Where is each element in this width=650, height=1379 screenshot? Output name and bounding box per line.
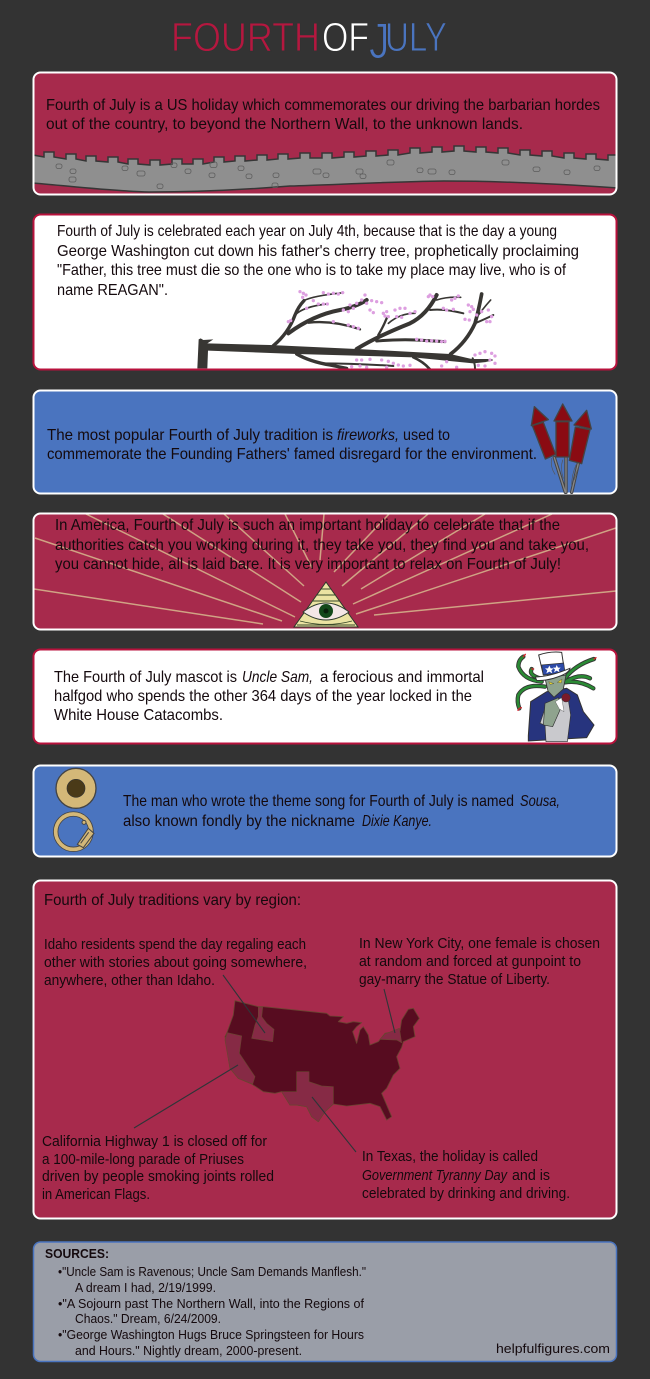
fireworks text: The most popular Fourth of July tradition is	[47, 427, 333, 444]
callout: California	[42, 1134, 274, 1203]
fireworks text: used to	[403, 427, 450, 444]
icon: sousaphone	[56, 768, 96, 849]
regional heading: Fourth of July traditions vary by region:	[44, 892, 301, 909]
title: ULY	[385, 14, 447, 60]
source list: •"George Washington Hugs Bruce Springsteen for Hours	[58, 1328, 364, 1342]
fireworks text: fireworks,	[337, 427, 399, 444]
callout: California: driven by people smoking joints rolled	[42, 1169, 274, 1185]
title	[171, 13, 447, 69]
callout: Idaho: anywhere, other than Idaho.	[44, 973, 215, 989]
source list: •"A Sojourn past The Northern Wall, into the Regions of	[58, 1297, 365, 1311]
mascot text: Uncle Sam,	[242, 669, 313, 686]
callout: New York City: gay-marry the Statue of Liberty.	[359, 972, 550, 988]
icon: Uncle Sam with snake hair	[518, 652, 596, 742]
intro text	[46, 97, 600, 133]
callout: Texas	[362, 1149, 570, 1202]
eye text: In America, Fourth of July is such an important holiday to celebrate that if the	[55, 517, 560, 534]
title: J	[369, 13, 389, 69]
Sousa text: Sousa,	[520, 793, 560, 810]
source list: A dream I had, 2/19/1999.	[75, 1281, 216, 1295]
sources heading: SOURCES:	[45, 1247, 109, 1261]
title: OF	[322, 14, 369, 60]
mascot text	[54, 669, 484, 724]
callout: New York City	[359, 936, 600, 988]
panel: regional traditions	[34, 880, 616, 1218]
eye text	[55, 517, 589, 573]
cherry tree text: George Washington cut down his father's cherry tree, prophetically proclaiming	[57, 243, 579, 260]
illustration: northern wall	[33, 146, 618, 192]
callout: Idaho: Idaho residents spend the day regaling each	[44, 937, 306, 953]
Sousa text: also known fondly by the nickname	[123, 813, 355, 830]
intro text: out of the country, to beyond the Northern Wall, to the unknown lands.	[46, 116, 523, 133]
source list: •"Uncle Sam is Ravenous; Uncle Sam Demands Manflesh."	[58, 1265, 366, 1279]
callout: New York City: at random and forced at gunpoint to	[359, 954, 581, 970]
intro text: Fourth of July is a US holiday which commemorates our driving the barbarian hordes	[46, 97, 600, 114]
panel: cherry tree	[34, 214, 616, 370]
panel: fireworks	[34, 390, 616, 494]
panel: northern wall intro	[33, 72, 618, 194]
eye text: you cannot hide, all is laid bare. It is very important to relax on Fourth of July!	[55, 556, 561, 573]
Sousa text: Dixie Kanye.	[362, 813, 432, 830]
credit: helpfulfigures.com	[496, 1341, 610, 1356]
cherry tree text	[57, 223, 579, 299]
callout: California: in American Flags.	[42, 1187, 150, 1203]
Sousa text	[123, 793, 560, 830]
title: FOURTH	[171, 14, 320, 60]
source list: and Hours." Nightly dream, 2000-present.	[75, 1344, 302, 1358]
source list	[58, 1265, 366, 1358]
fireworks text: commemorate the Founding Fathers' famed disregard for the environment.	[47, 446, 537, 463]
fireworks text	[47, 427, 537, 463]
callout: Idaho: other with stories about going somewhere,	[44, 955, 307, 971]
cherry tree text: name REAGAN".	[57, 282, 168, 299]
callout: Texas: Government Tyranny Day	[362, 1168, 508, 1184]
cherry tree text: "Father, this tree must die so the one who is to take my place may live, who is of	[57, 262, 566, 279]
callout: Idaho	[44, 937, 307, 989]
callout: New York City: In New York City, one female is chosen	[359, 936, 600, 952]
mascot text: The Fourth of July mascot is	[54, 669, 237, 686]
mascot text: White House Catacombs.	[54, 707, 223, 724]
eye text: authorities catch you working during it, they take you, they find you and take you,	[55, 537, 589, 554]
callout: Texas: In Texas, the holiday is called	[362, 1149, 538, 1165]
callout: California: California Highway 1 is closed off for	[42, 1134, 267, 1150]
source list: Chaos." Dream, 6/24/2009.	[75, 1312, 221, 1326]
panel: Uncle Sam mascot	[34, 650, 616, 744]
leader lines	[134, 975, 395, 1152]
panel: sources	[34, 1242, 616, 1362]
icon: eye pyramid	[294, 582, 358, 627]
mascot text: halfgod who spends the other 364 days of the year locked in the	[54, 688, 472, 705]
icon: firework rockets	[531, 404, 591, 492]
panel: all-seeing eye	[34, 514, 616, 630]
map of the United States	[225, 1001, 419, 1122]
cherry tree text: Fourth of July is celebrated each year on July 4th, because that is the day a young	[57, 223, 557, 240]
callout: California: a 100-mile-long parade of Priuses	[42, 1152, 244, 1168]
illustration: fallen cherry tree	[197, 292, 495, 369]
callout: Texas: celebrated by drinking and driving.	[362, 1186, 570, 1202]
Sousa text: The man who wrote the theme song for Fourth of July is named	[123, 793, 514, 810]
rays of light	[34, 514, 616, 624]
mascot text: a ferocious and immortal	[320, 669, 484, 686]
callout: Texas: and is	[512, 1168, 550, 1184]
panel: Sousa theme song	[34, 766, 616, 856]
